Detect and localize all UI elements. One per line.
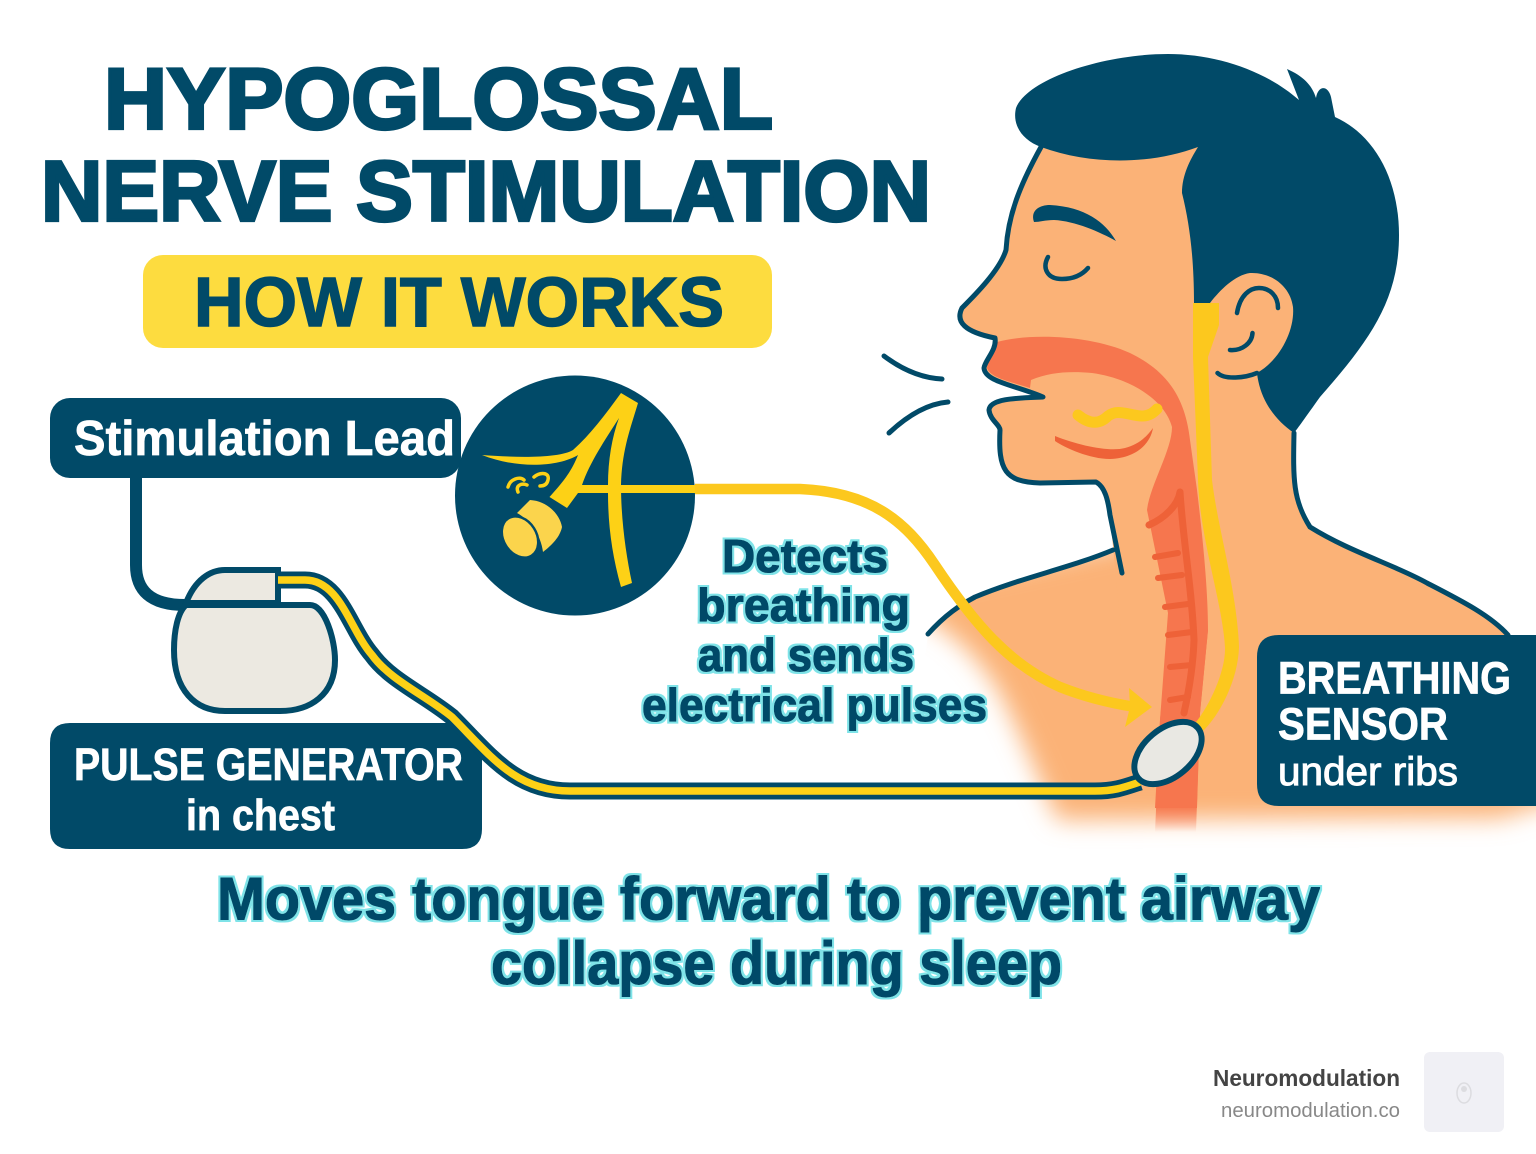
title: NERVE STIMULATION bbox=[41, 144, 931, 240]
icon: nerve and electrode circle bbox=[455, 376, 700, 616]
nerve fibres bbox=[508, 474, 548, 492]
electrode cuff bbox=[517, 500, 562, 552]
tongue nerve bbox=[1078, 409, 1157, 422]
callout: detects breathing: electrical pulses bbox=[642, 679, 987, 731]
arrow: pulses to airway bbox=[695, 489, 1152, 727]
horizontal lead bbox=[578, 485, 700, 493]
icon: breath lines bbox=[884, 356, 948, 433]
icon: implanted pulse generator bbox=[174, 570, 335, 711]
footer: brand name: Neuromodulation bbox=[1213, 1065, 1400, 1091]
caption: mechanism summary: Moves tongue forward to prevent airway bbox=[217, 866, 1321, 932]
callout: detects breathing: Detects bbox=[722, 530, 888, 582]
panel: breathing sensor label: BREATHING bbox=[1278, 652, 1511, 704]
panel: stimulation lead label: Stimulation Lead bbox=[74, 412, 455, 466]
cable: generator to sensor bbox=[278, 580, 1140, 791]
panel: breathing sensor label bbox=[1257, 635, 1536, 806]
callout: detects breathing bbox=[642, 530, 987, 731]
shoulder and neck outlines bbox=[928, 433, 1508, 635]
caption: mechanism summary: collapse during sleep bbox=[491, 930, 1062, 997]
ear details bbox=[1218, 288, 1278, 378]
torso skin with faded edge bbox=[900, 500, 1536, 820]
illustration: patient head and torso profile bbox=[900, 54, 1536, 832]
face outline bbox=[960, 147, 1122, 573]
panel: pulse generator label bbox=[50, 723, 482, 849]
subtitle: how it works badge: HOW IT WORKS bbox=[194, 263, 724, 341]
footer: brand name bbox=[1213, 1065, 1400, 1122]
closed eye bbox=[1046, 257, 1088, 279]
footer: brand name: neuromodulation.co bbox=[1221, 1100, 1400, 1122]
title: HYPOGLOSSAL bbox=[104, 52, 773, 148]
icon: breathing sensor bbox=[1123, 710, 1213, 796]
trachea rungs bbox=[1149, 492, 1194, 732]
nerve branches bbox=[482, 393, 638, 587]
head and neck skin bbox=[960, 147, 1310, 640]
lower mouth crescent bbox=[1055, 428, 1153, 459]
eyebrow bbox=[1033, 205, 1116, 241]
nerve to sensor bbox=[1193, 303, 1239, 732]
connector: stimulation lead wire bbox=[136, 470, 185, 605]
panel: breathing sensor label: under ribs bbox=[1278, 750, 1458, 794]
panel: stimulation lead label bbox=[50, 398, 461, 478]
panel: pulse generator label: in chest bbox=[186, 791, 335, 840]
title bbox=[41, 52, 931, 240]
panel: pulse generator label: PULSE GENERATOR bbox=[74, 739, 463, 790]
caption: mechanism summary bbox=[217, 866, 1321, 997]
airway bbox=[1147, 630, 1208, 832]
footer: logo placeholder bbox=[1424, 1052, 1504, 1132]
callout: detects breathing: breathing bbox=[697, 579, 910, 631]
callout: detects breathing: and sends bbox=[698, 629, 914, 681]
hair bbox=[1015, 54, 1399, 433]
panel: breathing sensor label: SENSOR bbox=[1278, 698, 1448, 750]
